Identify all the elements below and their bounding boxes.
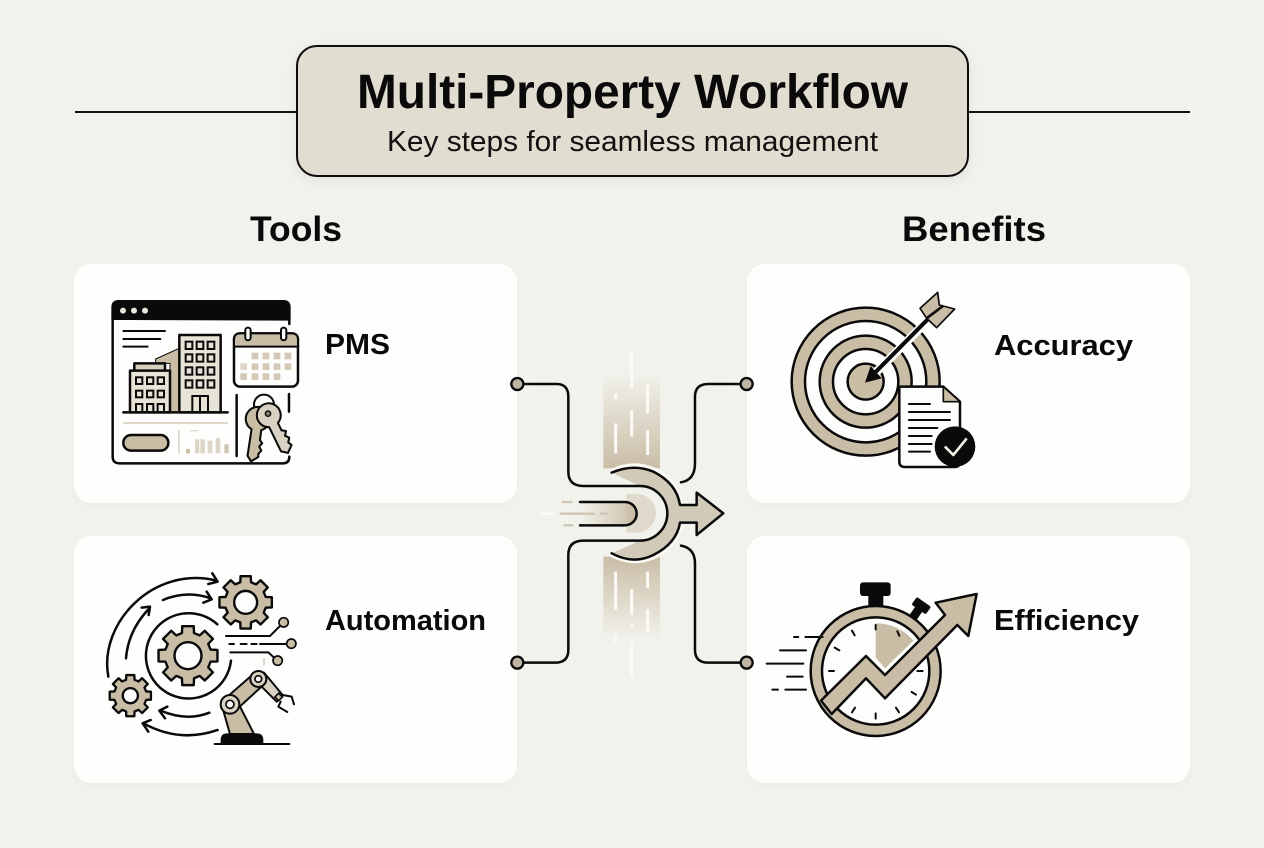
panel: PMS <box>74 264 517 503</box>
heading: Tools: Tools <box>250 210 342 249</box>
panel: Efficiency <box>747 536 1190 783</box>
label: Efficiency: Efficiency <box>994 605 1139 637</box>
connector nodes <box>511 378 753 669</box>
vertical flow band: top <box>603 373 660 468</box>
label: PMS: PMS <box>325 329 390 361</box>
panel: Accuracy <box>747 264 1190 503</box>
central merge diagram <box>511 350 753 677</box>
inner flow U-shape <box>541 494 656 533</box>
header rule left <box>75 111 297 113</box>
vertical flow band: bottom <box>603 557 660 640</box>
subtitle: Key steps for seamless management <box>387 126 878 158</box>
connector: merge to Efficiency <box>681 546 741 663</box>
title: Multi-Property Workflow <box>357 66 909 119</box>
panel: Automation <box>74 536 517 783</box>
connector: merge to Accuracy <box>681 384 741 482</box>
merged arrow shape <box>612 467 723 560</box>
title banner <box>297 46 968 176</box>
icon: gears and robot arm <box>107 573 296 744</box>
label: Automation: Automation <box>325 605 486 637</box>
icon: property management window <box>111 300 298 463</box>
icon: stopwatch with rising arrow <box>767 582 977 736</box>
icon: target with arrow and document <box>792 292 975 467</box>
label: Accuracy: Accuracy <box>994 330 1133 362</box>
heading: Benefits: Benefits <box>902 210 1046 249</box>
header rule right <box>968 111 1190 113</box>
connector: PMS to merge <box>523 384 667 663</box>
